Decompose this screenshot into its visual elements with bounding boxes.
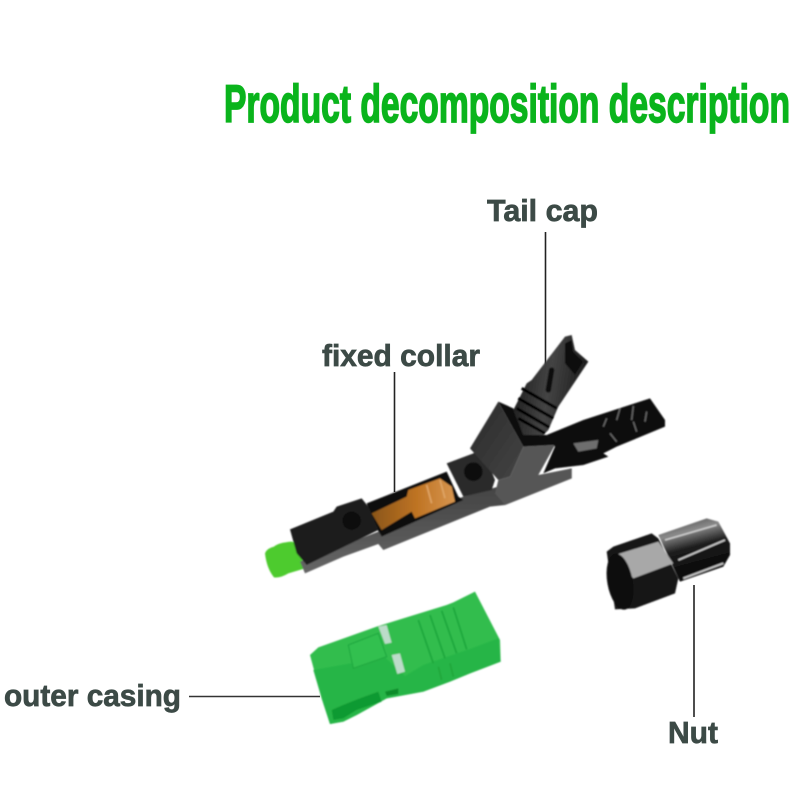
label: outer casing: outer casing: [4, 678, 181, 713]
hinge block: [470, 402, 572, 505]
rear latch arm: [543, 398, 665, 473]
ferrule green tip: [265, 542, 305, 577]
casing latch tab: [348, 633, 387, 668]
label: tail cap: Tail cap: [487, 193, 598, 228]
front black housing: [290, 498, 378, 565]
mid block: [447, 447, 495, 497]
knurled section: [658, 518, 730, 582]
fixed collar copper: [372, 478, 455, 530]
fixed collar cavity: [367, 472, 463, 537]
casing ribs: [418, 607, 467, 680]
lower body rail: [300, 468, 572, 573]
nut: [603, 518, 730, 612]
tail cap: [513, 335, 588, 435]
hex section: [607, 533, 678, 609]
casing lower side face: [313, 638, 501, 724]
nut opening: [603, 552, 637, 612]
outer casing: [310, 592, 501, 724]
casing front slot: [332, 692, 382, 720]
connector assembly: [265, 335, 665, 577]
label: nut: Nut: [668, 715, 718, 750]
label: fixed collar: fixed collar: [322, 338, 480, 373]
casing windows: [378, 625, 405, 674]
